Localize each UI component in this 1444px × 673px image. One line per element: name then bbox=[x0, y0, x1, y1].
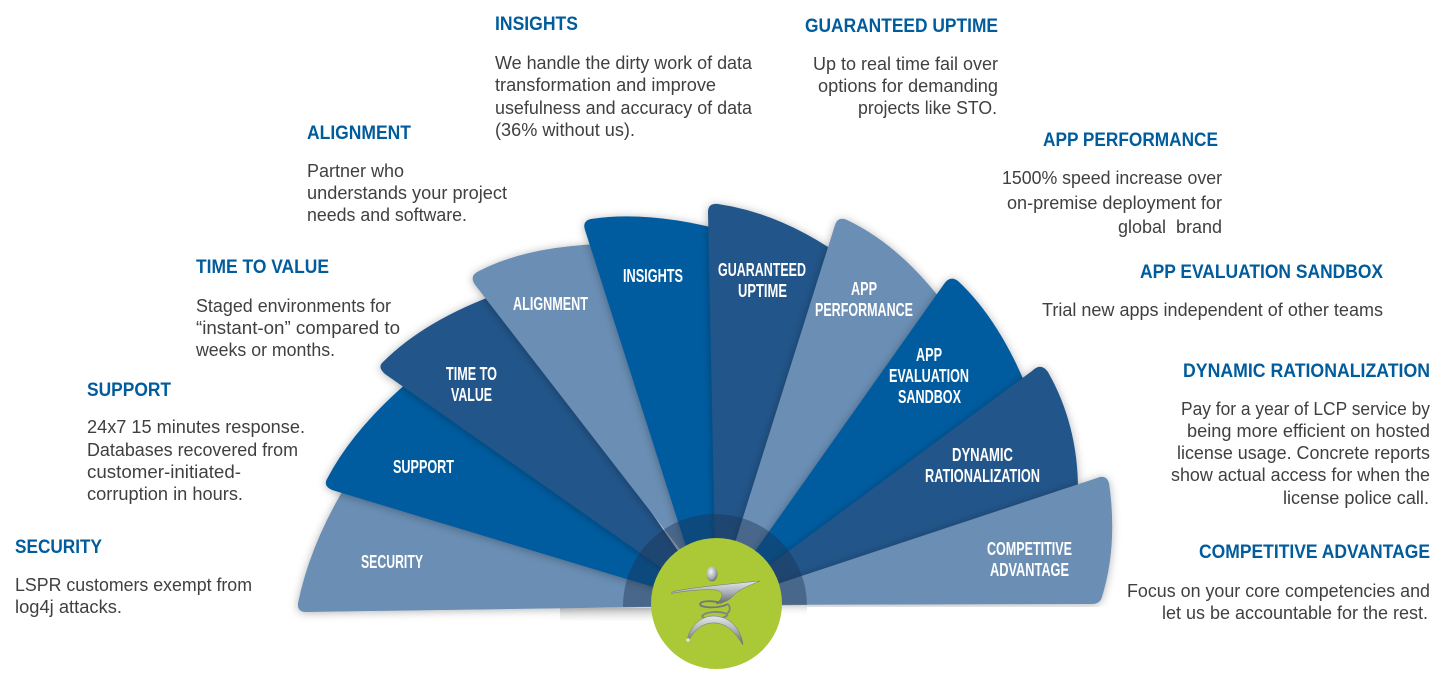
text block: time to value: Staged environments for bbox=[196, 296, 391, 316]
petal: insights: INSIGHTS bbox=[623, 266, 683, 286]
petal: dynamic rationalization bbox=[717, 367, 1078, 605]
text block: dynamic rationalization: DYNAMIC RATIONALIZATION bbox=[1183, 361, 1430, 382]
text block: support: Databases recovered from bbox=[87, 440, 298, 460]
text block: alignment: needs and software. bbox=[307, 205, 467, 225]
text block: security bbox=[15, 537, 252, 617]
text block: dynamic rationalization bbox=[1171, 361, 1430, 508]
text block: app performance bbox=[1002, 130, 1222, 237]
text block: support: 24x7 15 minutes response. bbox=[87, 417, 305, 437]
text block: time to value: “instant-on” compared to bbox=[196, 318, 400, 338]
text block: app performance: global brand bbox=[1118, 217, 1222, 237]
petal: time to value: TIME TO bbox=[446, 364, 497, 384]
text block: insights: INSIGHTS bbox=[495, 14, 578, 35]
petal: app evaluation sandbox: APP bbox=[916, 345, 942, 365]
text block: time to value: TIME TO VALUE bbox=[196, 257, 329, 278]
petal: support: SUPPORT bbox=[393, 457, 454, 477]
text block: security: log4j attacks. bbox=[15, 597, 122, 617]
petal: time to value: VALUE bbox=[451, 385, 492, 405]
petal: alignment: ALIGNMENT bbox=[513, 294, 588, 314]
text block: app evaluation sandbox: Trial new apps independent of other teams bbox=[1042, 300, 1383, 320]
petal: competitive advantage bbox=[717, 477, 1127, 637]
text block: insights: usefulness and accuracy of data bbox=[495, 98, 753, 118]
petal: security bbox=[298, 487, 716, 612]
text block: alignment: Partner who bbox=[307, 161, 404, 181]
text block: alignment: ALIGNMENT bbox=[307, 123, 411, 144]
text block: insights: We handle the dirty work of data bbox=[495, 53, 753, 73]
fan chart bbox=[298, 204, 1127, 669]
petal: guaranteed uptime: UPTIME bbox=[738, 281, 787, 301]
text block: alignment bbox=[307, 123, 507, 225]
text block: alignment: understands your project bbox=[307, 183, 507, 203]
text block: app performance: on-premise deployment for bbox=[1007, 193, 1222, 213]
petal: support bbox=[326, 372, 716, 606]
logo: green circle with silver figure bbox=[651, 538, 782, 669]
text block: dynamic rationalization: show actual access for when the bbox=[1171, 465, 1430, 485]
petal: guaranteed uptime bbox=[708, 204, 840, 600]
petal: dynamic rationalization: DYNAMIC bbox=[952, 445, 1013, 465]
text block: app performance: APP PERFORMANCE bbox=[1043, 130, 1218, 151]
text block: support bbox=[87, 380, 305, 504]
petal: dynamic rationalization: RATIONALIZATION bbox=[925, 466, 1040, 486]
text block: time to value: weeks or months. bbox=[195, 340, 335, 360]
petal: competitive advantage: ADVANTAGE bbox=[990, 560, 1069, 580]
petal: app evaluation sandbox: EVALUATION bbox=[889, 366, 969, 386]
petal: competitive advantage: COMPETITIVE bbox=[987, 539, 1072, 559]
text block: insights: transformation and improve bbox=[495, 75, 716, 95]
petal: alignment bbox=[473, 244, 716, 596]
text block: guaranteed uptime: options for demanding bbox=[818, 76, 998, 96]
text block: insights: (36% without us). bbox=[495, 120, 635, 140]
text block: dynamic rationalization: license usage. Concrete reports bbox=[1177, 443, 1430, 463]
text block: guaranteed uptime: GUARANTEED UPTIME bbox=[805, 16, 998, 37]
petal: guaranteed uptime: GUARANTEED bbox=[718, 260, 806, 280]
text block: app evaluation sandbox: APP EVALUATION SANDBOX bbox=[1140, 262, 1383, 283]
text block: app evaluation sandbox bbox=[1042, 262, 1383, 320]
text block: dynamic rationalization: Pay for a year of LCP service by bbox=[1181, 399, 1430, 419]
text block: competitive advantage: Focus on your core competencies and bbox=[1127, 581, 1430, 601]
text block: guaranteed uptime: projects like STO. bbox=[858, 98, 997, 118]
text block: app performance: 1500% speed increase over bbox=[1002, 168, 1222, 188]
text block: security: LSPR customers exempt from bbox=[15, 575, 252, 595]
petal: app performance: APP bbox=[851, 279, 877, 299]
petal: time to value bbox=[380, 293, 716, 606]
text block: dynamic rationalization: license police call. bbox=[1283, 488, 1429, 508]
text block: time to value bbox=[195, 257, 400, 360]
text block: support: corruption in hours. bbox=[87, 484, 243, 504]
text block: dynamic rationalization: being more efficient on hosted bbox=[1187, 421, 1430, 441]
text block: guaranteed uptime: Up to real time fail over bbox=[813, 54, 998, 74]
petal: insights bbox=[584, 216, 730, 600]
text block: security: SECURITY bbox=[15, 537, 102, 558]
text block: guaranteed uptime bbox=[805, 16, 998, 118]
inner translucent ring bbox=[623, 514, 807, 607]
petal: security: SECURITY bbox=[361, 552, 423, 572]
text block: support: SUPPORT bbox=[87, 380, 171, 401]
text block: support: customer-initiated- bbox=[87, 462, 241, 482]
petal: app evaluation sandbox: SANDBOX bbox=[898, 387, 961, 407]
petal: app performance bbox=[717, 219, 945, 605]
floor shadow under centre-left bbox=[560, 608, 652, 622]
text block: competitive advantage: COMPETITIVE ADVANTAGE bbox=[1199, 542, 1430, 563]
petal: app performance: PERFORMANCE bbox=[815, 300, 913, 320]
text block: insights bbox=[495, 14, 753, 140]
text block: competitive advantage bbox=[1127, 542, 1430, 623]
text block: competitive advantage: let us be accountable for the rest. bbox=[1162, 603, 1428, 623]
petal: app evaluation sandbox bbox=[717, 279, 1030, 605]
